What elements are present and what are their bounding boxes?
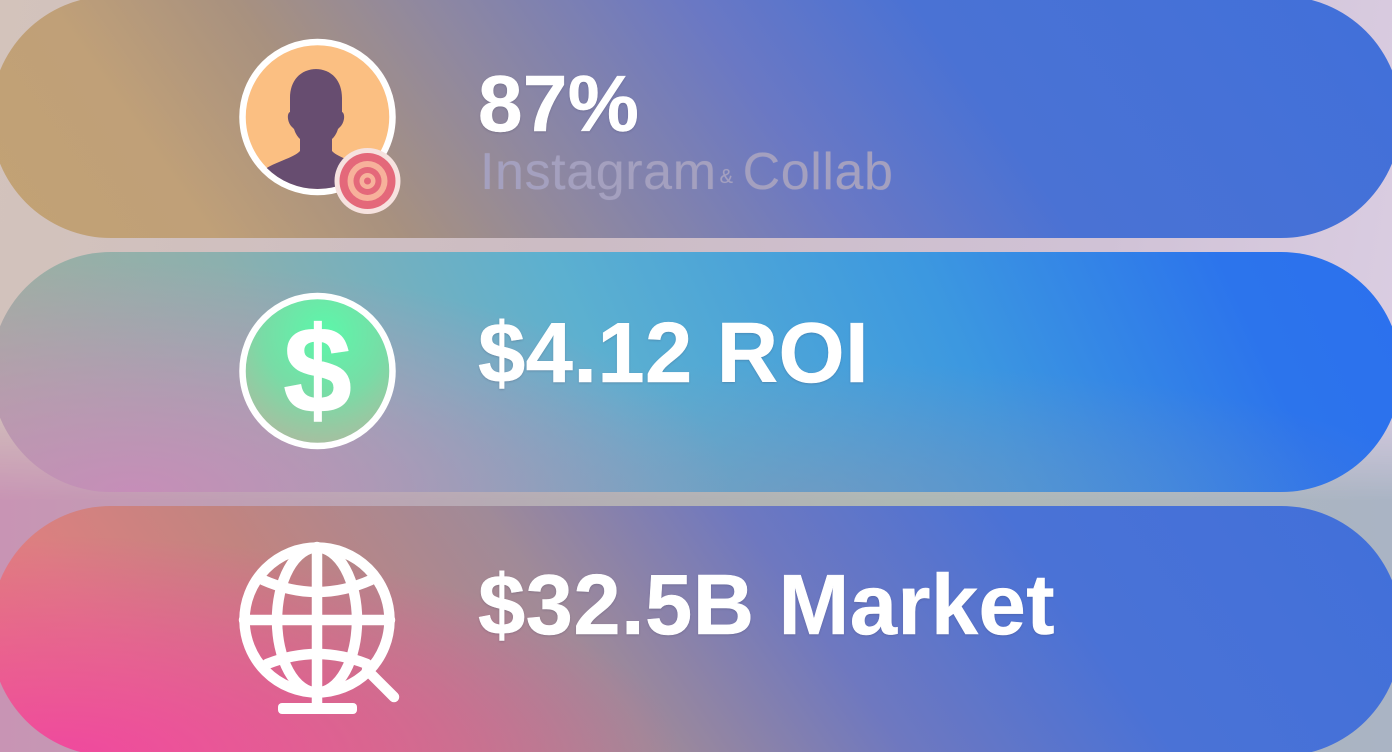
label: Instagram & Collab: Instagram&Collab [480,143,894,201]
stat: $4.12 ROI: $4.12 ROI [478,306,869,401]
icon: dollar coin: $ [284,302,351,438]
icon: globe with magnifier [238,542,400,714]
panel: market stat [0,506,1392,752]
stat: $32.5B Market: $32.5B Market [478,558,1055,653]
icon: person with target badge [239,38,400,214]
icon: target badge [334,148,400,214]
panel: ROI stat [0,252,1392,492]
icon: dollar coin [239,292,396,450]
stat: 87%: 87% [478,59,639,148]
panel: audience stat [0,0,1392,238]
